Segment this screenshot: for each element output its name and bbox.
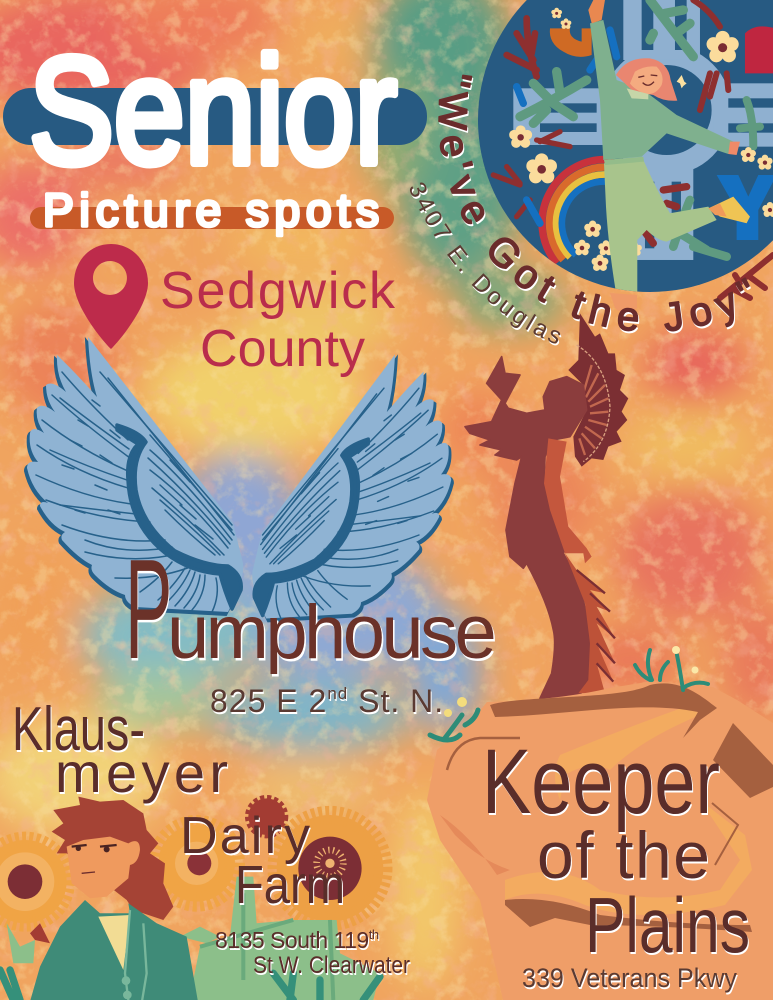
title banner bar (3, 88, 427, 145)
sunflowers (0, 798, 383, 943)
label: Pumphouse: umphouse (167, 590, 493, 675)
illustration: rock base (427, 681, 773, 1000)
girl (588, 0, 750, 311)
subtitle bar (30, 207, 394, 229)
text: P (125, 530, 172, 689)
label: Klaus-: Klaus- (12, 695, 145, 764)
mural address: 3407 E. Douglas: 3407 E. Douglas (410, 182, 562, 346)
address: 339 Veterans Pkwy: 339 Veterans Pkwy (522, 963, 737, 993)
zia symbol (513, 0, 773, 260)
location: Sedgwick: Sedgwick (160, 262, 396, 320)
icon: map pin (74, 244, 148, 349)
address: 8135 South 119th: 8135 South 119 (215, 927, 369, 953)
illustration: Pumphouse wings (25, 337, 453, 621)
plants on rock (430, 646, 708, 740)
label: Pumphouse (125, 530, 495, 689)
leaves (493, 0, 760, 257)
address: 825 E 2nd St. N.: 825 E 2 (210, 683, 327, 719)
address: 8135 South 119th: th (369, 927, 379, 942)
location: County: County (200, 320, 365, 378)
statue body (465, 357, 590, 698)
address: 825 E 2nd St. N.: St. N. (348, 683, 444, 719)
flowers (509, 8, 773, 271)
statue robe and fringe (544, 438, 615, 693)
label: meyer: meyer (55, 741, 228, 804)
illustration: Keeper of the Plains statue (465, 313, 628, 698)
foot and leaf over disc edge (610, 255, 773, 313)
farmer (27, 797, 200, 1000)
label: of the: of the (537, 818, 710, 892)
label: Dairy: Dairy (180, 807, 310, 865)
statue fan headdress (568, 313, 628, 467)
mural title: We've Got the Joy: "We've Got the Joy" (438, 74, 751, 334)
illustration: Oklahoma-style mural disc with jumping girl (478, 0, 773, 311)
stems and leaves (0, 877, 380, 1000)
label: Keeper: Keeper (482, 731, 720, 833)
label: Farm: Farm (235, 855, 345, 915)
letter shapes and rainbow (542, 26, 773, 263)
subtitle: Picture spots: Picture spots (43, 184, 379, 236)
address: 825 E 2nd St. N.: nd (327, 684, 348, 703)
address: St W. Clearwater: St W. Clearwater (253, 952, 410, 979)
illustration: sunflowers and Klausmeyer farmer (0, 797, 383, 1000)
title: Senior: Senior (29, 26, 397, 196)
